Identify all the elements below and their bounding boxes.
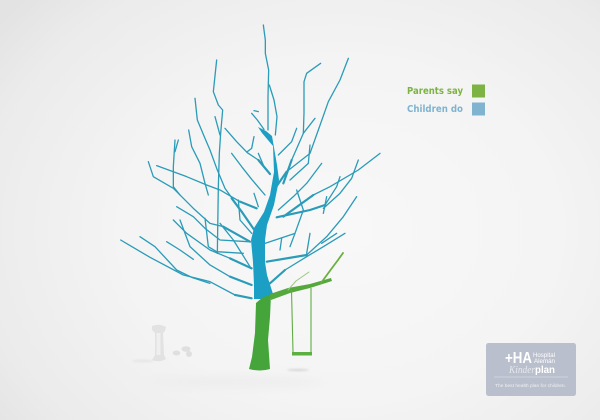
logo: tagline: The best health plan for children. (495, 383, 566, 388)
ground shadows (132, 360, 325, 387)
green branch (270, 278, 332, 300)
logo: HA mark: +HA (505, 350, 532, 367)
logo panel (486, 343, 576, 396)
logo panel: plan (535, 365, 555, 376)
pillar (152, 325, 166, 361)
main blue trunk (251, 127, 279, 299)
tree (121, 25, 380, 371)
logo: hospital name: Hospital (533, 353, 555, 359)
legend swatch: children do (472, 102, 485, 116)
legend text: parents say: Parents say (407, 86, 463, 97)
thicker inner limbs (223, 160, 325, 298)
rubble stones (173, 346, 192, 357)
logo panel: Alemán (534, 359, 555, 365)
green trunk (249, 295, 271, 370)
legend swatch: parents say (472, 84, 485, 98)
swing (292, 288, 312, 356)
logo: kinder plan: Kinder (508, 365, 535, 376)
legend text: children do: Children do (407, 104, 463, 115)
blue painted branches (121, 25, 380, 298)
